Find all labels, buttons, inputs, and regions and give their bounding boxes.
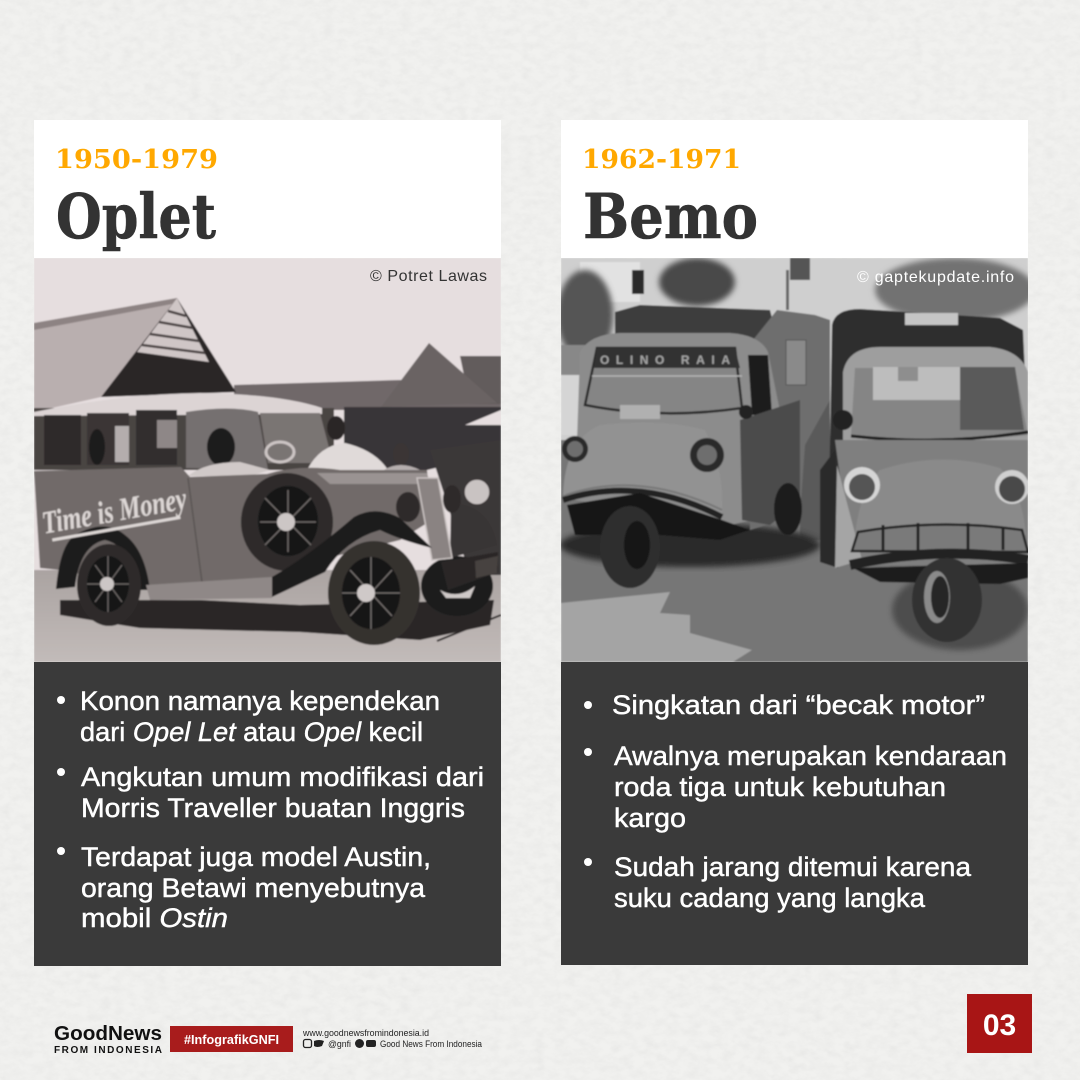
painted lettering on the car: Time is Money: [39, 480, 190, 541]
year range: Oplet: 1950-1979: [55, 145, 218, 175]
bullet 2: roda tiga untuk kebutuhan: [614, 772, 946, 802]
photo credit: Oplet: © Potret Lawas: [370, 268, 487, 285]
heading: Oplet: Oplet: [56, 180, 216, 253]
footer logo: GoodNews From Indonesia: [54, 1022, 162, 1056]
header card: Oplet: [34, 120, 501, 258]
page number badge: [967, 994, 1032, 1053]
header card: Bemo: [561, 120, 1028, 258]
page number badge: 03: [983, 1009, 1016, 1042]
bullet 2: kargo: [614, 803, 686, 833]
painted lettering on the car: [42, 493, 187, 542]
panel: Oplet: [34, 120, 501, 966]
photo: two Bemo vehicles: OLINO RAIA: [600, 353, 730, 367]
bullet 2: [584, 741, 1007, 833]
bullet 3: [584, 852, 972, 913]
bullet 3: mobil Ostin: [81, 903, 228, 933]
footer logo: GoodNews From Indonesia: GoodNews: [54, 1022, 162, 1045]
hashtag badge: #InfografikGNFI: [184, 1032, 279, 1047]
bullet 3: Terdapat juga model Austin,: [81, 842, 431, 872]
bullet 2: Awalnya merupakan kendaraan: [614, 741, 1007, 771]
text panel: Bemo facts: [561, 662, 1028, 965]
bullet 3: Sudah jarang ditemui karena: [614, 852, 972, 882]
heading: Bemo: Bemo: [583, 180, 758, 253]
footer contact links: [302, 1028, 482, 1049]
footer contact links: Good News From Indonesia: [380, 1039, 482, 1049]
photo credit: Bemo: © gaptekupdate.info: [857, 269, 1014, 286]
photo: two Bemo vehicles: [557, 258, 1035, 662]
panel: Bemo: [557, 120, 1035, 965]
bullet 2: Angkutan umum modifikasi dari: [81, 762, 484, 792]
bullet 2: Morris Traveller buatan Inggris: [81, 793, 465, 823]
bullet 3: suku cadang yang langka: [614, 883, 926, 913]
footer logo: GoodNews From Indonesia: FROM INDONESIA: [54, 1045, 162, 1056]
hashtag badge: [170, 1026, 293, 1052]
bullet 2: [57, 762, 484, 823]
bullet 1: Konon namanya kependekan: [80, 686, 440, 716]
bullet 1: Singkatan dari “becak motor”: [612, 690, 985, 720]
footer contact links: @gnfi: [328, 1039, 351, 1049]
bullet 3: [57, 842, 431, 933]
bullet 1: dari Opel Let atau Opel kecil: [80, 717, 423, 747]
photo: vintage Oplet car: [34, 258, 501, 662]
text panel: Oplet facts: [34, 662, 501, 966]
year range: Bemo: 1962-1971: [582, 145, 741, 175]
bullet 3: orang Betawi menyebutnya: [81, 873, 426, 903]
footer contact links: www.goodnewsfromindonesia.id: [302, 1028, 429, 1038]
bullet 1: [57, 686, 440, 747]
